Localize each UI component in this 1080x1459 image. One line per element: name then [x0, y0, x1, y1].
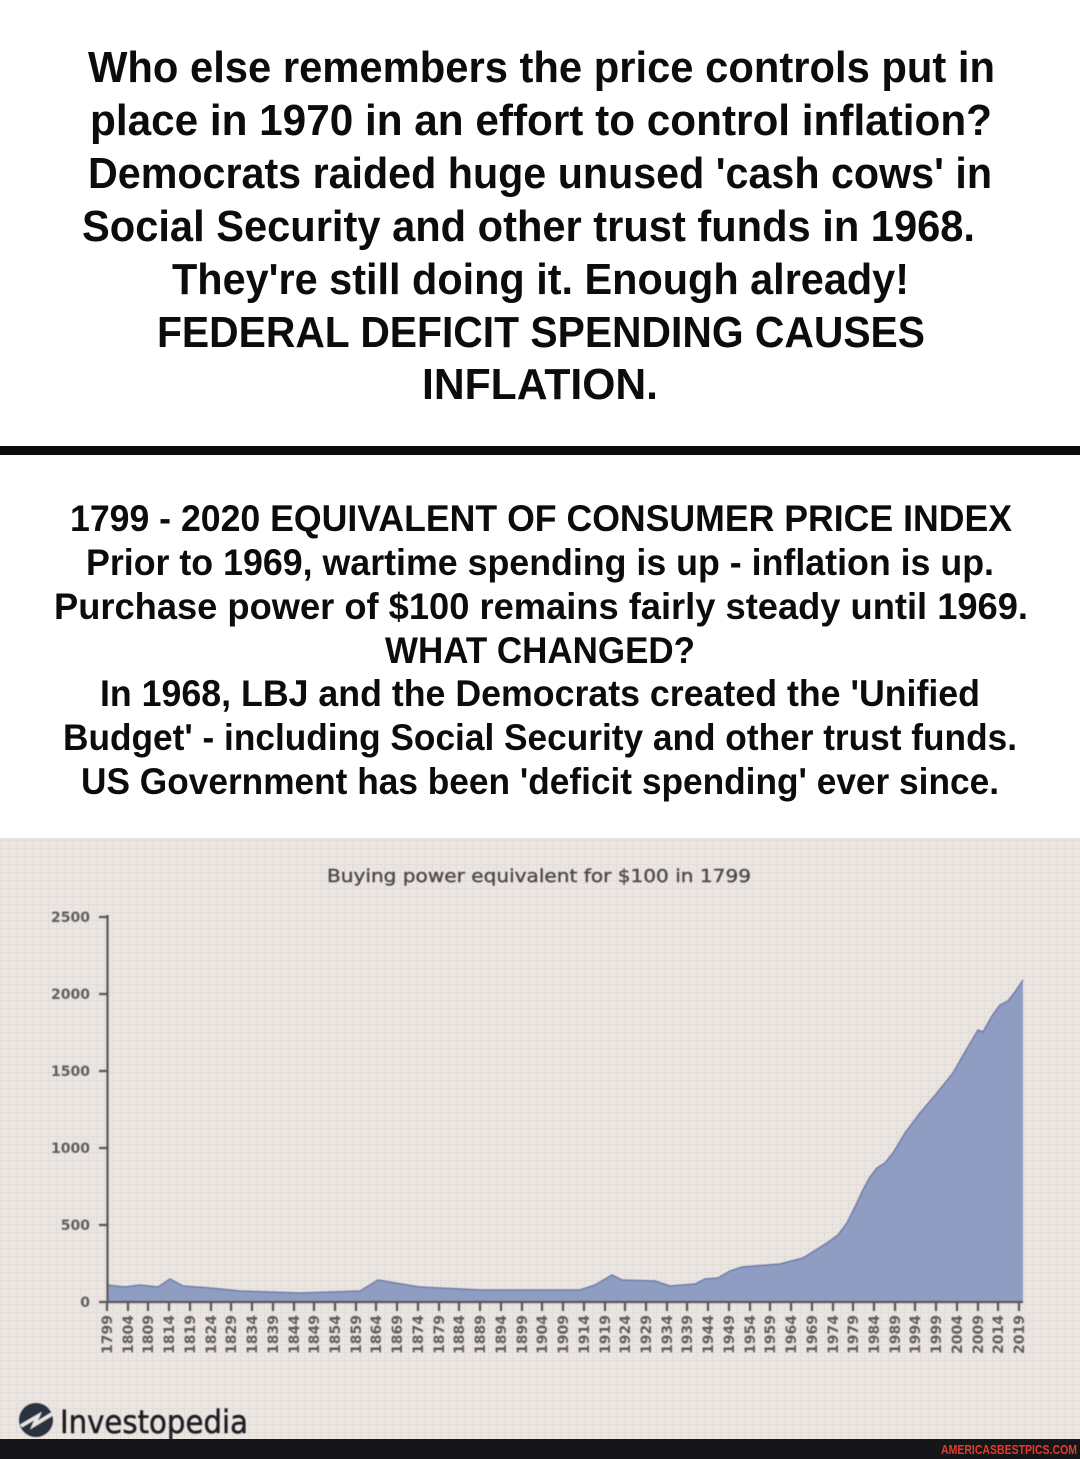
x axis labels: 1989 — [888, 1315, 904, 1354]
y axis labels: 1000 — [51, 1141, 90, 1157]
footer bar with watermark — [0, 1439, 1080, 1459]
x axis labels: 1939 — [680, 1315, 696, 1354]
text block: consumer price index explanation — [54, 498, 1028, 802]
y axis labels: 1500 — [51, 1064, 90, 1080]
x axis labels: 1999 — [929, 1315, 945, 1354]
y axis labels: 2000 — [51, 987, 90, 1003]
logo: Investopedia — [19, 1403, 248, 1441]
y axis labels: 0 — [80, 1295, 90, 1311]
heading: price controls statement: They're still doing it. Enough already! — [172, 255, 909, 304]
text block: consumer price index explanation: US Government has been 'deficit spending' ever since. — [81, 761, 999, 802]
logo wordmark: Investopedia — [60, 1403, 248, 1441]
x axis labels: 1974 — [826, 1315, 842, 1354]
x axis labels: 1849 — [307, 1315, 323, 1354]
x axis labels: 2004 — [950, 1315, 966, 1354]
x axis labels: 1914 — [577, 1315, 593, 1354]
x axis labels: 1929 — [639, 1315, 655, 1354]
area series — [107, 980, 1023, 1302]
x axis labels: 1944 — [701, 1315, 717, 1354]
x axis labels: 1854 — [328, 1315, 344, 1354]
x axis labels: 1819 — [183, 1315, 199, 1354]
x axis labels: 1864 — [369, 1315, 385, 1354]
x axis labels — [100, 1315, 1028, 1354]
x axis labels: 2014 — [991, 1315, 1007, 1354]
x axis labels: 1919 — [598, 1315, 614, 1354]
icon: Investopedia mark — [19, 1403, 53, 1437]
x axis labels: 1844 — [287, 1315, 303, 1354]
x axis labels: 1869 — [390, 1315, 406, 1354]
x axis labels: 1899 — [515, 1315, 531, 1354]
x axis labels: 1909 — [556, 1315, 572, 1354]
x axis labels: 1809 — [141, 1315, 157, 1354]
divider bar — [0, 446, 1080, 455]
text block: consumer price index explanation: WHAT CHANGED? — [385, 630, 695, 671]
chart: buying power equivalent — [51, 866, 1028, 1354]
heading: price controls statement: Who else remembers the price controls put in — [88, 43, 995, 92]
x axis labels: 1954 — [743, 1315, 759, 1354]
y axis labels — [51, 910, 90, 1311]
axes and ticks — [99, 915, 1023, 1311]
text block: consumer price index explanation: In 1968, LBJ and the Democrats created the 'Unified — [100, 673, 980, 714]
x axis labels: 1904 — [535, 1315, 551, 1354]
heading: price controls statement: Social Security and other trust funds in 1968. — [82, 202, 975, 251]
x axis labels: 1824 — [204, 1315, 220, 1354]
x axis labels: 1969 — [805, 1315, 821, 1354]
heading: price controls statement: INFLATION. — [422, 360, 658, 409]
x axis labels: 1884 — [452, 1315, 468, 1354]
x axis labels: 1859 — [349, 1315, 365, 1354]
x axis labels: 1879 — [432, 1315, 448, 1354]
x axis labels: 1994 — [908, 1315, 924, 1354]
y axis labels: 2500 — [51, 910, 90, 926]
y axis labels: 500 — [61, 1218, 90, 1234]
x axis labels: 1984 — [867, 1315, 883, 1354]
x axis labels: 1964 — [784, 1315, 800, 1354]
text block: consumer price index explanation: Prior to 1969, wartime spending is up - inflation is up. — [86, 542, 994, 583]
x axis labels: 2019 — [1012, 1315, 1028, 1354]
text block: consumer price index explanation: 1799 - 2020 EQUIVALENT OF CONSUMER PRICE INDEX — [70, 498, 1012, 539]
x axis labels: 1949 — [722, 1315, 738, 1354]
text block: consumer price index explanation: Purchase power of $100 remains fairly steady until 1969. — [54, 586, 1028, 627]
panel: chart background — [0, 838, 1080, 1439]
x axis labels: 1874 — [411, 1315, 427, 1354]
chart title: Buying power equivalent for $100 in 1799 — [327, 866, 751, 887]
x axis labels: 1839 — [266, 1315, 282, 1354]
x axis labels: 1834 — [245, 1315, 261, 1354]
x axis labels: 1829 — [224, 1315, 240, 1354]
x axis labels: 2009 — [971, 1315, 987, 1354]
x axis labels: 1804 — [121, 1315, 137, 1354]
x axis labels: 1889 — [473, 1315, 489, 1354]
heading: price controls statement: FEDERAL DEFICIT SPENDING CAUSES — [157, 308, 925, 357]
area series outline — [107, 980, 1023, 1293]
x axis labels: 1894 — [494, 1315, 510, 1354]
heading: price controls statement — [82, 43, 995, 409]
heading: price controls statement: Democrats raided huge unused 'cash cows' in — [88, 149, 992, 198]
x axis labels: 1799 — [100, 1315, 116, 1354]
text block: consumer price index explanation: Budget' - including Social Security and other trust funds. — [63, 717, 1017, 758]
x axis labels: 1934 — [660, 1315, 676, 1354]
x axis labels: 1924 — [618, 1315, 634, 1354]
x axis labels: 1959 — [763, 1315, 779, 1354]
x axis labels: 1814 — [162, 1315, 178, 1354]
x axis labels: 1979 — [846, 1315, 862, 1354]
heading: price controls statement: place in 1970 in an effort to control inflation? — [90, 96, 992, 145]
